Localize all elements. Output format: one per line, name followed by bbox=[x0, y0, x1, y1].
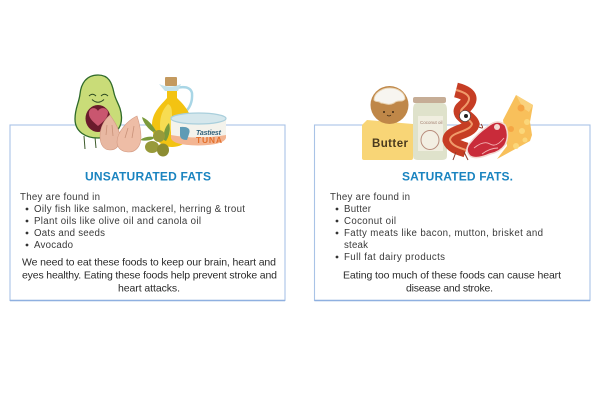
text block: saturated risks: Eating too much of these foods can cause heart bbox=[343, 270, 561, 282]
heading: saturated fats: SATURATED FATS. bbox=[402, 170, 513, 184]
icon: avocado bbox=[75, 75, 122, 149]
icon: cheese bbox=[497, 95, 533, 159]
icon: coconut oil jar: Coconut oil bbox=[420, 120, 443, 125]
panel: saturated fats bbox=[314, 125, 590, 300]
text block: unsaturated benefits: heart attacks. bbox=[118, 282, 180, 294]
icon: coconut bbox=[370, 86, 408, 124]
text block: saturated food sources: They are found in bbox=[330, 192, 410, 203]
text block: saturated food sources: Fatty meats like bacon, mutton, brisket and bbox=[344, 228, 543, 239]
text block: unsaturated benefits: We need to eat these foods to keep our brain, heart and bbox=[22, 256, 276, 268]
text block: unsaturated food sources: They are found in bbox=[20, 192, 100, 203]
text block: saturated food sources: Coconut oil bbox=[344, 216, 396, 227]
text block: unsaturated food sources: Avocado bbox=[34, 240, 73, 251]
text block: saturated food sources bbox=[330, 192, 543, 263]
icon: olives bbox=[140, 117, 170, 156]
icon: tuna can: TUNA bbox=[196, 135, 222, 145]
icon: butter: Butter bbox=[372, 138, 409, 150]
icon: coconut oil jar bbox=[413, 97, 447, 160]
text block: unsaturated food sources: Oily fish like salmon, mackerel, herring & trout bbox=[34, 204, 245, 215]
icon: steak bbox=[467, 122, 508, 158]
icon: bacon character bbox=[450, 90, 483, 160]
text block: unsaturated food sources: Oats and seeds bbox=[34, 228, 105, 239]
text block: saturated risks: disease and stroke. bbox=[406, 282, 493, 294]
text block: unsaturated food sources bbox=[20, 192, 245, 251]
text block: saturated food sources: steak bbox=[344, 240, 368, 251]
icon: tuna can: Tastiest bbox=[196, 130, 222, 137]
icon: olive oil bottle bbox=[152, 77, 192, 147]
heading: unsaturated fats: UNSATURATED FATS bbox=[85, 170, 211, 184]
text block: saturated food sources: Full fat dairy products bbox=[344, 252, 445, 263]
text block: saturated food sources: Butter bbox=[344, 204, 372, 215]
icon: almonds bbox=[100, 115, 141, 152]
text block: unsaturated benefits: eyes healthy. Eating these foods help prevent stroke and bbox=[22, 270, 277, 282]
text block: unsaturated food sources: Plant oils like olive oil and canola oil bbox=[34, 216, 201, 227]
text block: saturated risks bbox=[343, 270, 561, 294]
icon: butter bbox=[362, 120, 413, 160]
icon: tuna can bbox=[171, 113, 226, 146]
text block: unsaturated benefits bbox=[22, 256, 277, 294]
panel: unsaturated fats bbox=[10, 125, 285, 300]
